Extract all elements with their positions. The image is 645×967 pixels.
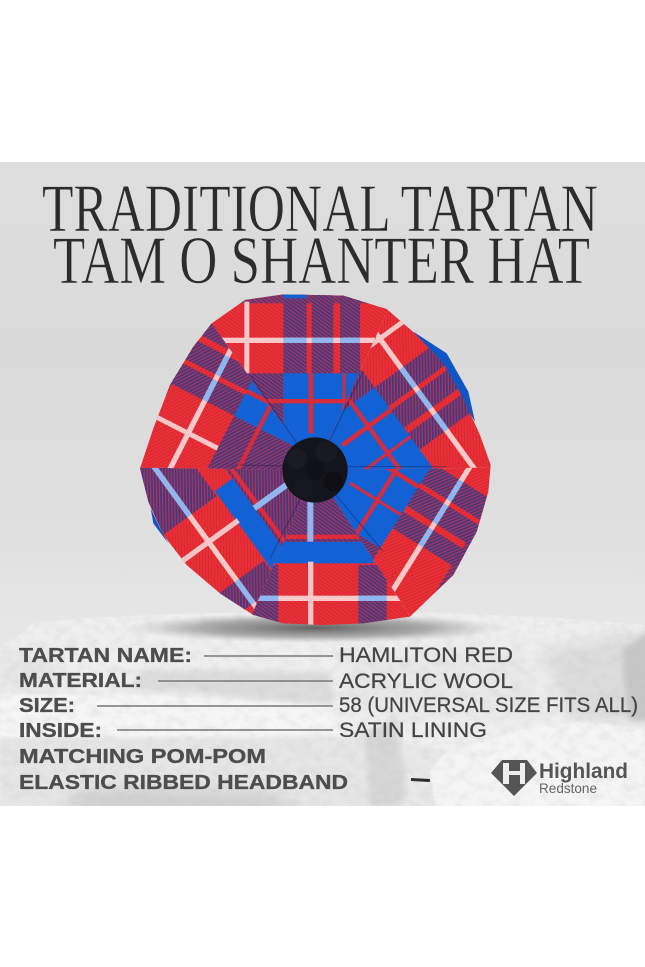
hat shadow xyxy=(125,613,505,643)
tartan hat xyxy=(140,294,491,625)
specification values: 58 (UNIVERSAL SIZE FITS ALL) xyxy=(339,694,638,717)
specification labels: SIZE: xyxy=(19,694,75,717)
rock gap xyxy=(405,745,450,806)
specification values xyxy=(339,644,638,742)
specification values: SATIN LINING xyxy=(339,719,487,742)
logo: Highland Redstone: Highland xyxy=(539,760,628,783)
specification labels: INSIDE: xyxy=(19,719,102,742)
white middle ledge xyxy=(8,695,322,708)
specification labels xyxy=(19,644,348,794)
specification labels: MATERIAL: xyxy=(19,669,142,692)
logo: Highland Redstone: Redstone xyxy=(539,780,597,796)
specification labels: TARTAN NAME: xyxy=(19,644,192,667)
specification labels: ELASTIC RIBBED HEADBAND xyxy=(19,771,348,794)
lower right boulder xyxy=(430,722,628,782)
grey studio backdrop xyxy=(0,162,645,806)
specification values: ACRYLIC WOOL xyxy=(339,670,513,693)
hat blue underside xyxy=(151,332,475,543)
logo: Highland Redstone xyxy=(491,760,628,796)
stone plinth xyxy=(0,610,645,812)
logo mark xyxy=(491,760,537,796)
upper slab shading xyxy=(130,670,335,704)
pom-pom xyxy=(282,437,348,503)
leader lines xyxy=(97,656,333,730)
specification labels: MATCHING POM-POM xyxy=(19,745,266,768)
stone grain xyxy=(0,612,645,806)
lower left boulder xyxy=(2,726,400,804)
hat crown segments xyxy=(140,294,491,625)
title xyxy=(42,170,598,298)
specification values: HAMLITON RED xyxy=(339,644,513,667)
